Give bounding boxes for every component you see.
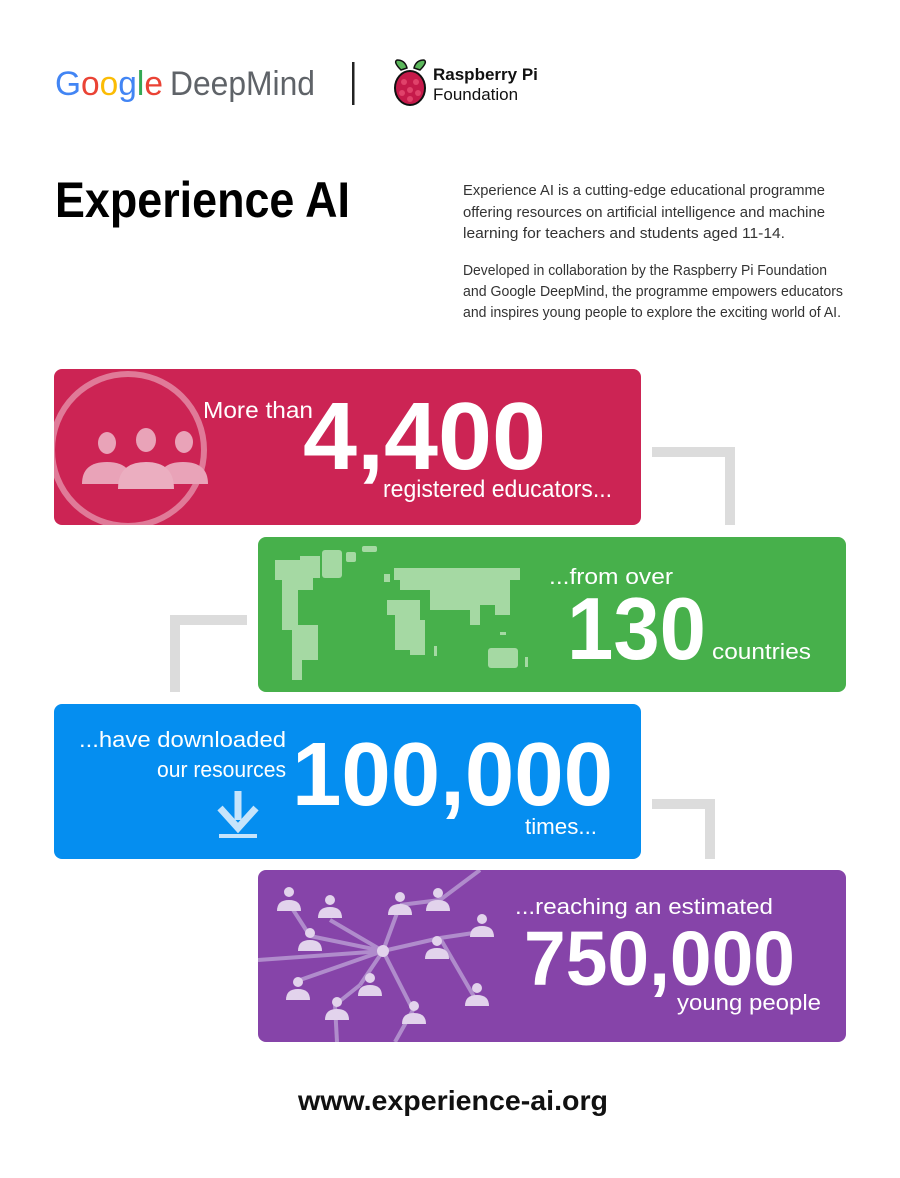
icon: raspberry [395,60,425,105]
panel: young people [258,870,846,1042]
text: reaching an estimated: ...reaching an estimated [515,894,773,919]
panel: countries [258,537,846,692]
panel: downloads: our resources [157,757,286,782]
arrow: connector green to blue [175,620,247,692]
number: 4,400: 4,400 [303,383,546,490]
text block: description: offering resources on artificial intelligence and machine [463,205,825,221]
arrow: connector blue to purple [652,804,710,859]
text block: description: and inspires young people to explore the exciting world of AI. [463,305,841,321]
icon: network [258,870,494,1042]
text: registered educators: registered educators... [383,476,612,503]
number: 750,000: 750,000 [524,916,795,1002]
title: Experience AI [55,172,350,228]
arrow: connector red to green [652,452,730,525]
text block: description: and Google DeepMind, the programme empowers educators [463,284,843,300]
icon: world map [275,546,528,680]
text: more than: More than [203,397,313,423]
text: have downloaded: ...have downloaded [79,727,286,752]
text block: description: Developed in collaboration by the Raspberry Pi Foundation [463,263,827,279]
icon: download arrow [219,791,257,838]
footer url: www.experience-ai.org [297,1085,608,1116]
logo: Google DeepMind: DeepMind [170,65,315,103]
panel: downloads [54,704,641,859]
text: countries: countries [712,639,811,664]
text: young people: young people [677,990,821,1015]
text block: description [463,183,843,321]
logo text: Raspberry Pi Foundation: Raspberry Pi [433,65,538,84]
panel: educators [52,369,641,526]
text: times: times... [525,814,597,839]
logo text: Raspberry Pi Foundation [433,65,538,104]
logo: Google DeepMind [55,65,315,103]
icon: people [52,374,208,526]
text: from over: ...from over [549,564,673,589]
logo text: Raspberry Pi Foundation: Foundation [433,85,518,104]
number: 130: 130 [567,579,706,678]
text block: description: learning for teachers and students aged 11-14. [463,226,785,242]
text block: description: Experience AI is a cutting-edge educational programme [463,183,825,199]
number: 100,000: 100,000 [292,725,613,825]
logo: Google DeepMind: Google [55,65,163,103]
